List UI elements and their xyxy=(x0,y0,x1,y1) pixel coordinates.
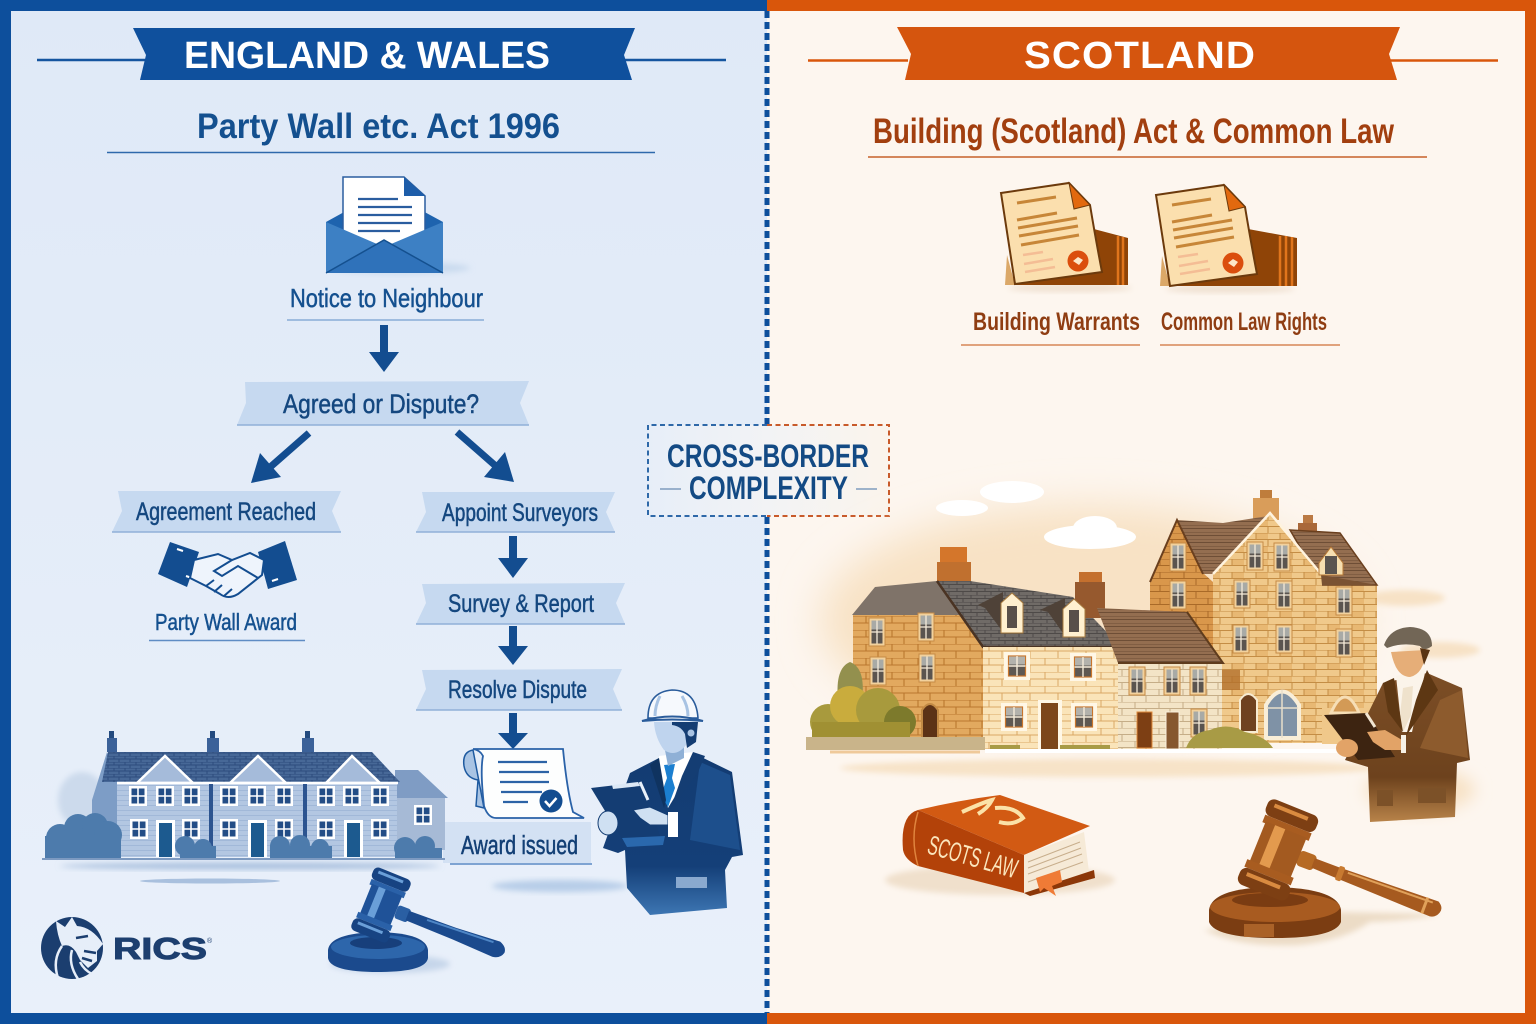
icon: award scroll xyxy=(464,749,584,818)
shrubs xyxy=(806,662,1355,752)
banner: Award issued: Award issued xyxy=(461,832,578,860)
logo text: RICS: RICS xyxy=(113,931,207,966)
decision banner: Agreed or Dispute? xyxy=(237,381,529,425)
label: Common Law Rights: Common Law Rights xyxy=(1161,308,1327,336)
heading banner: Scotland xyxy=(808,27,1498,80)
border divider xyxy=(764,11,770,1013)
banner: Appoint Surveyors xyxy=(416,492,615,532)
arrow: survey to resolve xyxy=(498,626,528,665)
decision banner: Agreed or Dispute?: Agreed or Dispute? xyxy=(283,389,479,419)
icon: handshake xyxy=(158,541,297,597)
tall house (rear) xyxy=(1150,490,1377,745)
arrow: resolve to award xyxy=(498,713,528,749)
heading banner: England & Wales: ENGLAND & WALES xyxy=(184,35,550,77)
arrow: notice to decision xyxy=(369,325,399,372)
callout: cross-border complexity xyxy=(648,425,889,516)
icon: brown gavel xyxy=(1204,797,1444,945)
banner: Survey & Report xyxy=(416,583,625,624)
arrow: to agreement xyxy=(251,433,309,483)
callout: cross-border complexity: CROSS-BORDER xyxy=(667,438,869,474)
banner: Agreement Reached xyxy=(112,491,341,532)
label: Building Warrants: Building Warrants xyxy=(973,308,1140,336)
panel: England & Wales background xyxy=(0,0,767,1024)
icon: blue gavel xyxy=(328,866,508,973)
icon: envelope with notice xyxy=(326,177,470,274)
icon: RICS lion logo xyxy=(41,917,103,979)
illustration: surveyor in hard hat xyxy=(492,690,743,915)
heading banner: England & Wales xyxy=(37,28,726,80)
banner: Resolve Dispute: Resolve Dispute xyxy=(448,676,587,704)
icon: building warrants document xyxy=(1001,183,1132,292)
subheading: Building (Scotland) Act & Common Law: Building (Scotland) Act & Common Law xyxy=(873,112,1395,151)
panel: Scotland background xyxy=(767,0,1536,1024)
heading banner: Scotland: SCOTLAND xyxy=(1024,35,1256,77)
arrow: surveyors to survey xyxy=(498,536,528,578)
label: Notice to Neighbour: Notice to Neighbour xyxy=(290,283,483,313)
icon: common law rights document xyxy=(1156,185,1297,293)
banner: Resolve Dispute xyxy=(416,669,622,710)
banner: Appoint Surveyors: Appoint Surveyors xyxy=(442,499,598,527)
arrow: to surveyors xyxy=(457,432,514,482)
small cottage xyxy=(1097,608,1223,749)
icon: Scots Law book xyxy=(885,795,1115,896)
illustration: Scottish surveyor in flat cap xyxy=(1324,627,1475,822)
icon: Scots Law book: SCOTS LAW xyxy=(924,830,1021,884)
banner: Survey & Report: Survey & Report xyxy=(448,590,594,618)
left stone house xyxy=(852,547,1122,750)
banner: Award issued xyxy=(443,822,592,864)
illustration: Scottish stone houses xyxy=(806,481,1480,777)
banner: Agreement Reached: Agreement Reached xyxy=(136,498,316,526)
subheading: Party Wall etc. Act 1996: Party Wall etc. Act 1996 xyxy=(197,107,560,146)
illustration: English terraced houses xyxy=(42,731,448,884)
callout: cross-border complexity: COMPLEXITY xyxy=(689,470,848,506)
label: Party Wall Award: Party Wall Award xyxy=(155,609,297,635)
logo text: RICS: ® xyxy=(207,937,213,945)
